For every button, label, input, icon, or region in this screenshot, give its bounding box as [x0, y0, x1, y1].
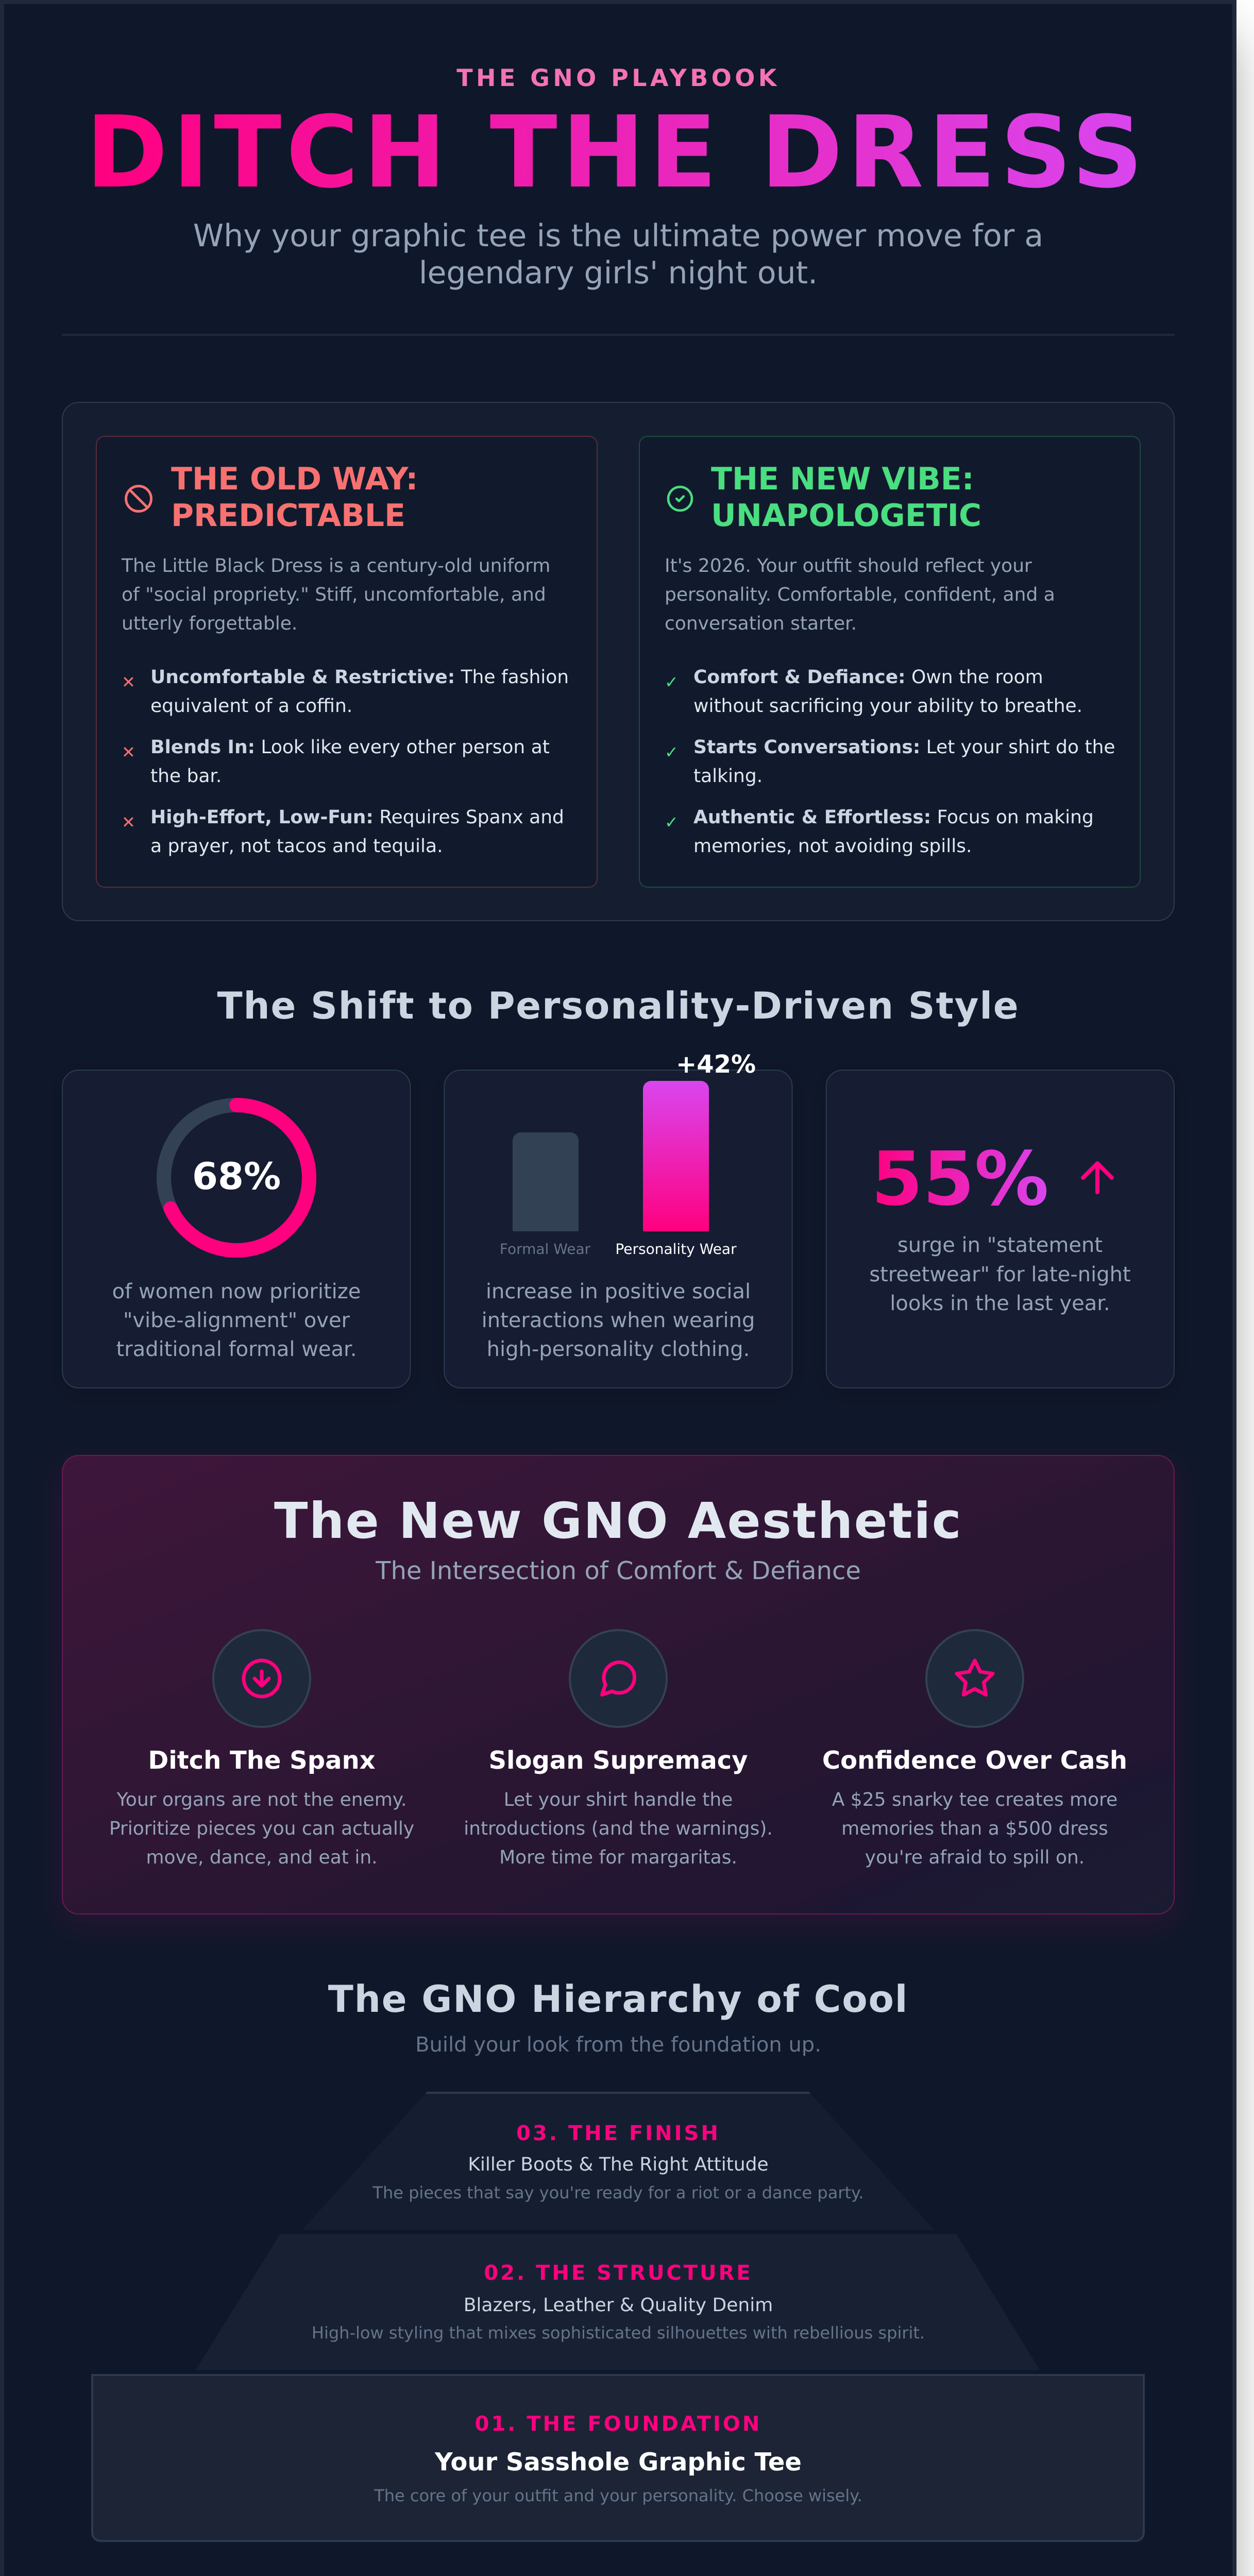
stat text: looks in the last year.: [890, 1292, 1110, 1315]
text: old way description: utterly forgettable.: [122, 613, 297, 634]
column: ditch the spanx: [109, 1630, 414, 1868]
list: new vibe: Comfort & Defiance: Own the room: [693, 667, 1043, 688]
list: old way: Uncomfortable & Restrictive: The fashion: [150, 667, 569, 688]
stat value: 55%: [871, 1136, 1049, 1222]
column text: More time for margaritas.: [499, 1847, 737, 1868]
bar label: formal wear: Formal Wear: [500, 1241, 591, 1258]
bar: formal wear: [513, 1132, 579, 1231]
bar value: +42%: [676, 1050, 756, 1079]
list: new vibe: memories, not avoiding spills.: [693, 836, 972, 857]
stat text: surge in "statement: [897, 1233, 1103, 1257]
text: new vibe description: It's 2026. Your outfit should reflect your: [665, 555, 1032, 577]
tier 3: the finish: [302, 2092, 934, 2230]
tier 1: the foundation: Your Sasshole Graphic Tee: [434, 2448, 802, 2477]
list: new vibe: without sacrificing your ability to breathe.: [693, 696, 1082, 717]
stat text: interactions when wearing: [482, 1309, 755, 1332]
column text: Let your shirt handle the: [504, 1789, 733, 1810]
icons: checks: ✓: [665, 812, 679, 832]
icons: crosses: ✕: [122, 672, 135, 692]
column heading: Confidence Over Cash: [822, 1746, 1127, 1775]
bar chart: [500, 1050, 756, 1258]
icons: checks: ✓: [665, 742, 679, 762]
header: [86, 64, 1148, 291]
column text: Prioritize pieces you can actually: [109, 1818, 414, 1839]
stat text: "vibe-alignment" over: [123, 1309, 350, 1332]
tier 2: the structure: [196, 2234, 1040, 2370]
heading: The New GNO Aesthetic: [274, 1492, 962, 1550]
list: new vibe: Authentic & Effortless: Focus on making: [693, 807, 1094, 828]
panel: the new gno aesthetic: [62, 1455, 1174, 1914]
text: new vibe description: conversation starter.: [665, 613, 857, 634]
heading: old way: PREDICTABLE: [171, 498, 405, 534]
column heading: Ditch The Spanx: [148, 1746, 376, 1775]
column text: move, dance, and eat in.: [146, 1847, 378, 1868]
donut value: 68%: [192, 1155, 281, 1198]
text: old way description: The Little Black Dress is a century-old uniform: [121, 555, 550, 577]
column: confidence over cash: [822, 1630, 1127, 1868]
stat text: of women now prioritize: [112, 1280, 361, 1303]
stat text: high-personality clothing.: [487, 1337, 750, 1361]
column text: introductions (and the warnings).: [464, 1818, 773, 1839]
icons: crosses: ✕: [122, 742, 135, 762]
icons: crosses: ✕: [122, 812, 135, 832]
panel: old way vs new vibe: [62, 402, 1174, 921]
bar: personality wear: [643, 1081, 709, 1231]
heading: the shift: The Shift to Personality-Driven Style: [217, 984, 1020, 1027]
tier 3: the finish: Killer Boots & The Right Attitude: [468, 2154, 769, 2175]
subheading: hierarchy: Build your look from the foundation up.: [415, 2033, 821, 2057]
icon: star: [926, 1630, 1023, 1727]
icon: arrow up: [1083, 1163, 1112, 1192]
list: new vibe: talking.: [693, 766, 762, 787]
heading: old way: THE OLD WAY:: [171, 461, 418, 497]
panel: the old way: [96, 436, 597, 887]
icons: checks: [665, 672, 679, 832]
donut chart: [164, 1105, 309, 1250]
stat card: 55%: [826, 1070, 1174, 1388]
heading: new vibe: THE NEW VIBE:: [711, 461, 974, 497]
list: new vibe: [693, 667, 1115, 857]
list: old way: High-Effort, Low-Fun: Requires Spanx and: [150, 807, 564, 828]
column text: A $25 snarky tee creates more: [832, 1789, 1117, 1810]
panel: the new vibe: [639, 436, 1140, 887]
tier 1: the foundation: The core of your outfit and your personality. Choose wisely.: [374, 2486, 862, 2505]
text: new vibe description: personality. Comfortable, confident, and a: [665, 584, 1055, 605]
list: old way: Blends In: Look like every other person at: [150, 737, 550, 758]
tier 2: the structure: Blazers, Leather & Quality Denim: [464, 2295, 773, 2316]
tier 1: the foundation: 01. THE FOUNDATION: [475, 2412, 761, 2436]
icon: speech bubble: [570, 1630, 667, 1727]
tier 3: the finish: 03. THE FINISH: [516, 2122, 720, 2145]
icon: check circle: [668, 487, 692, 511]
icons: checks: ✓: [665, 672, 679, 692]
eyebrow: THE GNO PLAYBOOK: [456, 64, 780, 92]
tier 1: the foundation: [92, 2375, 1144, 2541]
title: DITCH THE DRESS: [86, 95, 1148, 210]
column: slogan supremacy: [464, 1630, 773, 1868]
list: old way: the bar.: [150, 766, 222, 787]
column text: Your organs are not the enemy.: [116, 1789, 406, 1810]
subheading: The Intersection of Comfort & Defiance: [375, 1556, 861, 1585]
icons: crosses: [122, 672, 135, 832]
column text: you're afraid to spill on.: [865, 1847, 1084, 1868]
stat text: traditional formal wear.: [116, 1337, 357, 1361]
tier 2: the structure: 02. THE STRUCTURE: [484, 2261, 753, 2285]
tier 2: the structure: High-low styling that mixes sophisticated silhouettes with rebellious spirit.: [312, 2323, 925, 2343]
icon: arrow down circle: [213, 1630, 310, 1727]
list: old way: a prayer, not tacos and tequila.: [150, 836, 443, 857]
stat card: +42%: [444, 1050, 792, 1388]
heading: hierarchy of cool: The GNO Hierarchy of Cool: [328, 1977, 908, 2021]
icon: ban: [126, 486, 151, 511]
stat card: 68%: [62, 1070, 410, 1388]
subtitle: Why your graphic tee is the ultimate power move for a: [193, 218, 1043, 254]
list: old way: equivalent of a coffin.: [150, 696, 352, 717]
stat text: streetwear" for late-night: [869, 1263, 1131, 1286]
list: new vibe: Starts Conversations: Let your shirt do the: [693, 737, 1115, 758]
tier 3: the finish: The pieces that say you're ready for a riot or a dance party.: [372, 2183, 864, 2202]
pyramid: [92, 2092, 1144, 2541]
subtitle: legendary girls' night out.: [419, 255, 818, 291]
text: old way description: of "social propriety." Stiff, uncomfortable, and: [122, 584, 546, 605]
stat text: increase in positive social: [486, 1280, 751, 1303]
heading: new vibe: UNAPOLOGETIC: [711, 498, 981, 534]
column heading: Slogan Supremacy: [488, 1746, 748, 1775]
column text: memories than a $500 dress: [841, 1818, 1108, 1839]
list: old way: [150, 667, 569, 857]
bar label: personality wear: Personality Wear: [615, 1241, 737, 1258]
